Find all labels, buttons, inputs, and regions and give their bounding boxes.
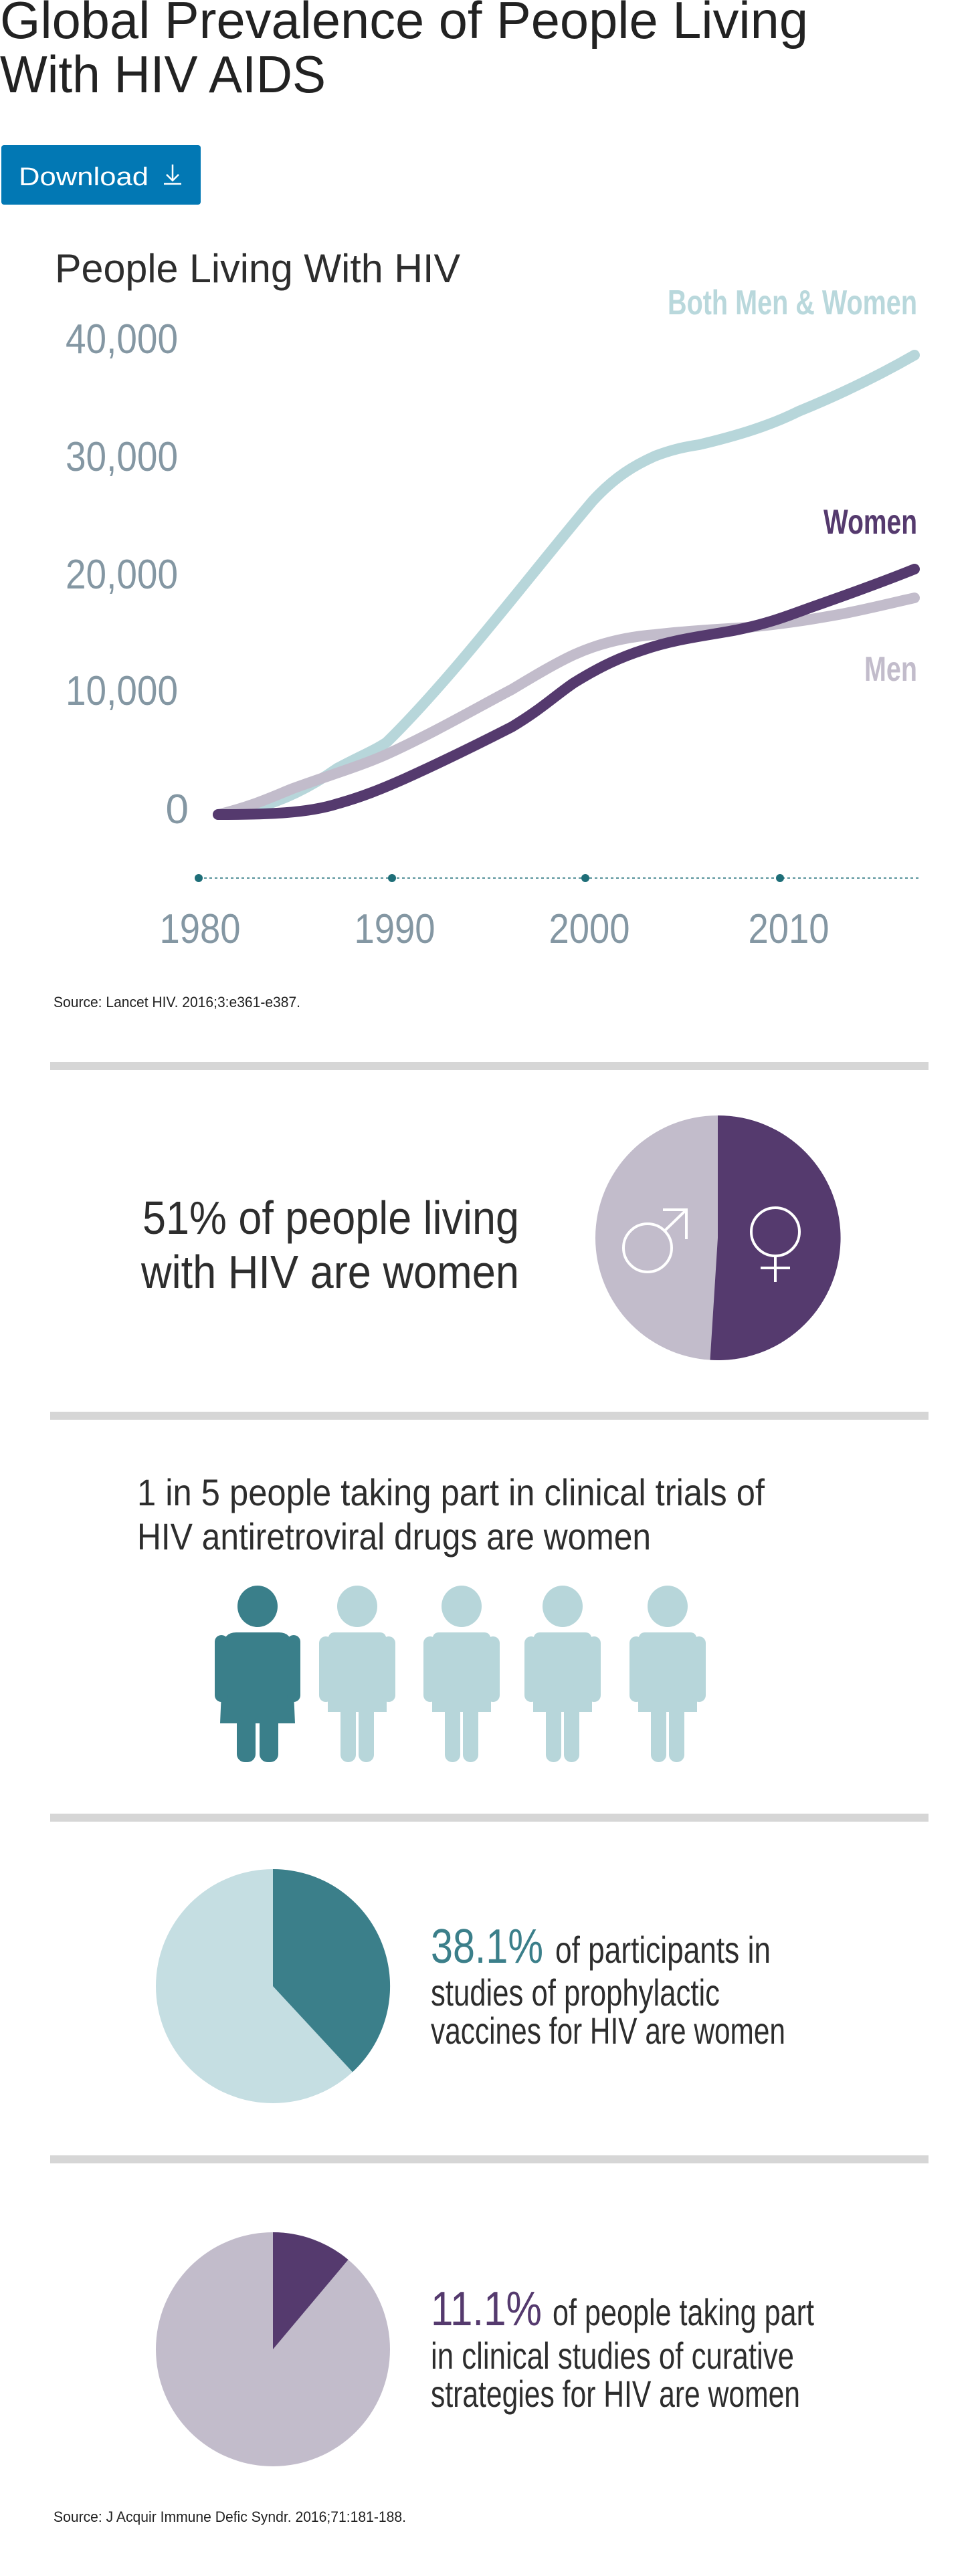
panel: 1 in 5	[137, 1471, 765, 1762]
series: women	[218, 569, 914, 815]
series labels	[668, 284, 917, 689]
panel: 51% women	[140, 1115, 841, 1360]
panel: 38.1% vaccines	[156, 1869, 785, 2103]
stat text: of participants in	[555, 1929, 771, 1971]
x axis	[159, 874, 921, 952]
icon: download arrow	[164, 165, 181, 184]
download button	[1, 145, 201, 205]
download button: Download	[19, 163, 149, 191]
chart title: People Living With HIV	[55, 246, 460, 291]
x axis: 2000	[549, 906, 630, 952]
stat text	[137, 1471, 765, 1558]
source 1: Source: Lancet HIV. 2016;3:e361-e387.	[54, 994, 300, 1010]
series: both	[218, 355, 914, 815]
stat text: with HIV are women	[140, 1246, 519, 1298]
title: With HIV AIDS	[0, 45, 326, 104]
icon: female symbol	[751, 1208, 799, 1282]
series labels: Men	[864, 650, 917, 689]
stat text: strategies for HIV are women	[431, 2373, 800, 2415]
pie: 38.1%	[156, 1869, 390, 2103]
y axis labels	[66, 316, 189, 833]
stat text: vaccines for HIV are women	[431, 2010, 785, 2052]
stat text	[431, 1920, 785, 2052]
icon: woman figure	[215, 1586, 300, 1762]
stat text: 1 in 5 people taking part in clinical trials of	[137, 1471, 765, 1513]
x axis: 2010	[748, 906, 830, 952]
pie: 11.1%	[156, 2232, 390, 2466]
stat text	[140, 1192, 519, 1298]
source 2: Source: J Acquir Immune Defic Syndr. 2016;71:181-188.	[54, 2508, 406, 2525]
icon: male symbol	[623, 1210, 686, 1272]
title	[0, 0, 808, 104]
y axis labels: 30,000	[66, 434, 178, 480]
icons: man figures	[319, 1586, 706, 1762]
stat text: HIV antiretroviral drugs are women	[137, 1515, 651, 1558]
pie: gender split	[595, 1115, 841, 1360]
stat text: studies of prophylactic	[431, 1971, 720, 2014]
series labels: Women	[823, 503, 917, 542]
stat text: in clinical studies of curative	[431, 2335, 794, 2377]
x axis: 1980	[159, 906, 241, 952]
y axis labels: 40,000	[66, 316, 178, 362]
panel: 11.1% curative	[156, 2232, 814, 2466]
stat text: 11.1%	[431, 2282, 542, 2336]
y axis labels: 0	[166, 786, 189, 833]
y axis labels: 20,000	[66, 552, 178, 598]
series: men	[218, 598, 914, 815]
stat text: 38.1%	[431, 1920, 543, 1973]
y axis labels: 10,000	[66, 668, 178, 714]
x axis: 1990	[355, 906, 435, 952]
stat text	[431, 2282, 814, 2415]
stat text: 51% of people living	[142, 1192, 519, 1244]
stat text: of people taking part	[553, 2291, 814, 2333]
line chart: people living with HIV	[54, 246, 921, 1010]
